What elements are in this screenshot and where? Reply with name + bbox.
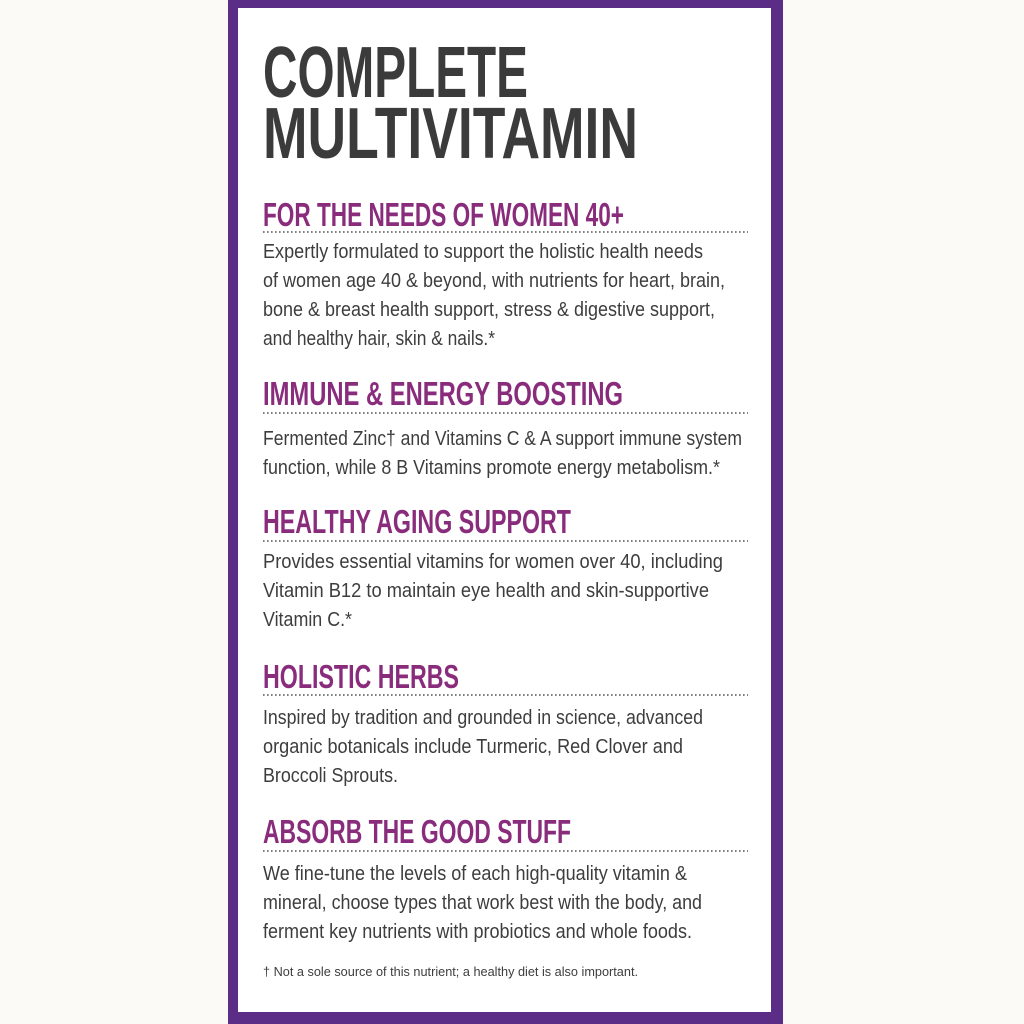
text block: aging: Provides essential vitamins for women over 40, including	[263, 551, 723, 573]
text block: herbs: Broccoli Sprouts.	[263, 765, 398, 787]
footnote: † Not a sole source of this nutrient; a healthy diet is also important.	[263, 964, 638, 979]
heading: healthy aging support: HEALTHY AGING SUPPORT	[263, 503, 571, 540]
title: COMPLETE	[263, 33, 528, 113]
text block: women 40+	[263, 241, 725, 350]
section: needs of women 40+	[263, 196, 748, 350]
text block: immune: function, while 8 B Vitamins promote energy metabolism.*	[263, 457, 720, 479]
panel: purple framed card	[228, 0, 783, 1024]
text block: absorb: ferment key nutrients with probiotics and whole foods.	[263, 921, 692, 943]
text block: herbs: Inspired by tradition and grounded in science, advanced	[263, 707, 703, 729]
text block: women 40+: and healthy hair, skin & nails.*	[263, 328, 495, 350]
text block: herbs	[263, 707, 703, 787]
heading: holistic herbs: HOLISTIC HERBS	[263, 658, 459, 695]
section: holistic herbs	[263, 658, 748, 787]
section: absorb the good stuff	[263, 813, 748, 943]
text block: women 40+: bone & breast health support, stress & digestive support,	[263, 299, 715, 321]
text block: absorb: We fine-tune the levels of each high-quality vitamin &	[263, 863, 688, 885]
text block: immune: Fermented Zinc† and Vitamins C & A support immune system	[263, 428, 742, 450]
text block: aging	[263, 551, 723, 631]
section: immune & energy	[263, 375, 748, 479]
heading: absorb the good stuff: ABSORB THE GOOD STUFF	[263, 813, 571, 850]
text block: women 40+: of women age 40 & beyond, with nutrients for heart, brain,	[263, 270, 725, 292]
title: MULTIVITAMIN	[263, 94, 638, 174]
text block: aging: Vitamin C.*	[263, 609, 352, 631]
heading: for the needs of women 40+: FOR THE NEEDS OF WOMEN 40+	[263, 196, 624, 233]
text block: aging: Vitamin B12 to maintain eye health and skin-supportive	[263, 580, 709, 602]
text block: herbs: organic botanicals include Turmeric, Red Clover and	[263, 736, 683, 758]
text block: immune	[263, 428, 742, 479]
text block: absorb: mineral, choose types that work best with the body, and	[263, 892, 702, 914]
text block: absorb	[263, 863, 702, 943]
title	[263, 33, 638, 174]
heading: immune & energy boosting: IMMUNE & ENERGY BOOSTING	[263, 375, 623, 412]
section: healthy aging	[263, 503, 748, 631]
text block: women 40+: Expertly formulated to support the holistic health needs	[263, 241, 703, 263]
